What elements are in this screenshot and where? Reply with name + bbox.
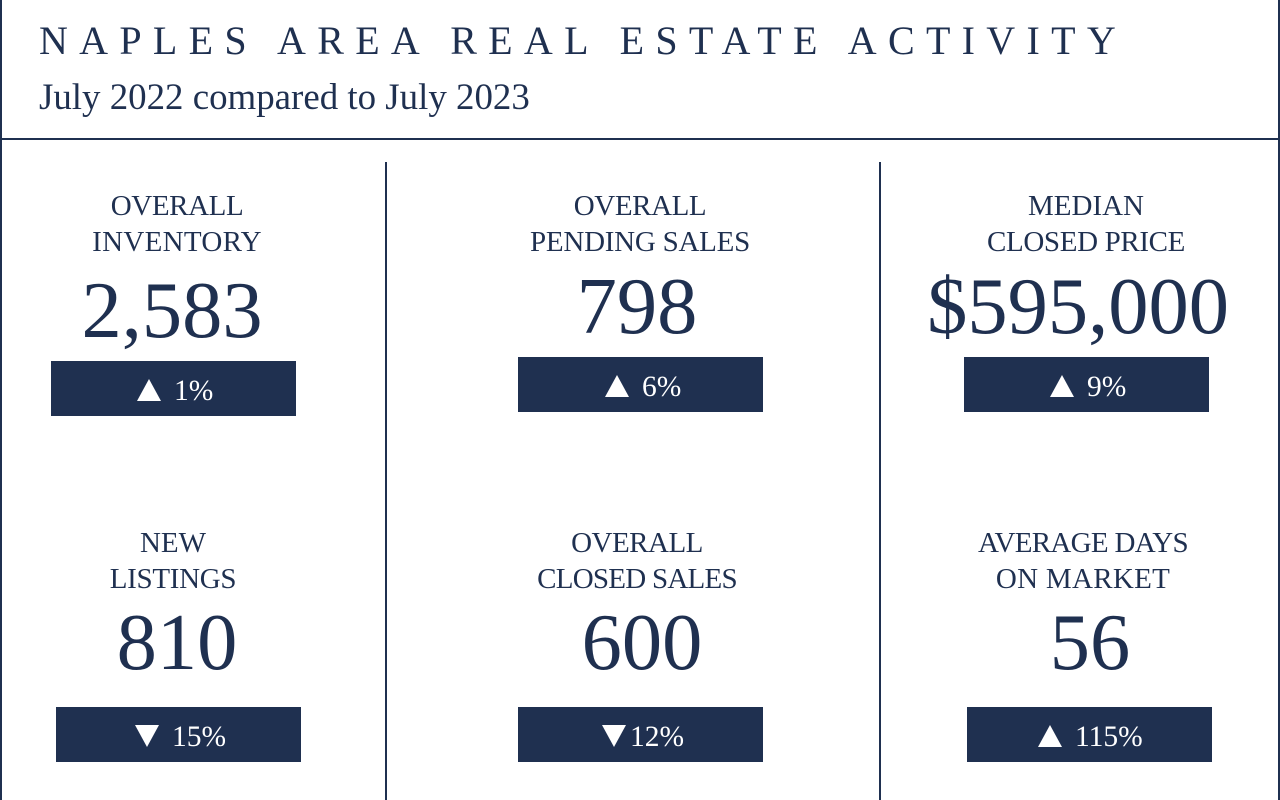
label: INVENTORY <box>92 226 262 258</box>
label <box>537 527 737 595</box>
value: 2,583 <box>81 266 263 355</box>
value: 600 <box>582 598 702 687</box>
change badge: 12% <box>630 721 684 753</box>
change badge: 9% <box>1087 371 1126 403</box>
icon: down triangle <box>135 725 159 747</box>
change badge: 15% <box>172 721 226 753</box>
icon: up triangle <box>1038 725 1062 747</box>
value: 798 <box>577 262 697 351</box>
panel: average days on market <box>967 527 1212 762</box>
change badge: 6% <box>642 371 681 403</box>
label: OVERALL <box>574 190 706 222</box>
label: OVERALL <box>571 527 703 559</box>
label <box>978 527 1188 595</box>
icon: down triangle <box>602 725 626 747</box>
label: CLOSED PRICE <box>987 226 1185 258</box>
change badge <box>51 361 296 416</box>
value: 810 <box>117 598 237 687</box>
change badge <box>518 707 763 762</box>
value: $595,000 <box>927 262 1229 351</box>
icon: up triangle <box>137 379 161 401</box>
panel: new listings <box>56 527 301 762</box>
change badge: 115% <box>1075 721 1143 753</box>
label: CLOSED SALES <box>537 563 737 595</box>
label: ON MARKET <box>996 563 1170 595</box>
column divider 2 <box>879 162 881 800</box>
panel: overall inventory <box>51 190 296 416</box>
label <box>92 190 262 258</box>
change badge: 1% <box>174 375 213 407</box>
panel: overall closed sales <box>518 527 763 762</box>
label: AVERAGE DAYS <box>978 527 1188 559</box>
change badge <box>518 357 763 412</box>
right border <box>1278 138 1280 800</box>
label: LISTINGS <box>110 563 236 595</box>
change badge <box>964 357 1209 412</box>
label: NEW <box>140 527 206 559</box>
panel: overall pending sales <box>518 190 763 412</box>
label <box>987 190 1185 258</box>
panel: median closed price <box>927 190 1229 412</box>
label: OVERALL <box>111 190 243 222</box>
subtitle: July 2022 compared to July 2023 <box>39 76 530 117</box>
value: 56 <box>1050 598 1130 687</box>
label: PENDING SALES <box>530 226 750 258</box>
title: NAPLES AREA REAL ESTATE ACTIVITY <box>39 18 1127 63</box>
icon: up triangle <box>1050 375 1074 397</box>
label: MEDIAN <box>1028 190 1144 222</box>
change badge <box>967 707 1212 762</box>
change badge <box>56 707 301 762</box>
column divider 1 <box>385 162 387 800</box>
label <box>110 527 236 595</box>
label <box>530 190 750 258</box>
icon: up triangle <box>605 375 629 397</box>
left border <box>0 138 2 800</box>
header panel <box>0 0 1280 140</box>
